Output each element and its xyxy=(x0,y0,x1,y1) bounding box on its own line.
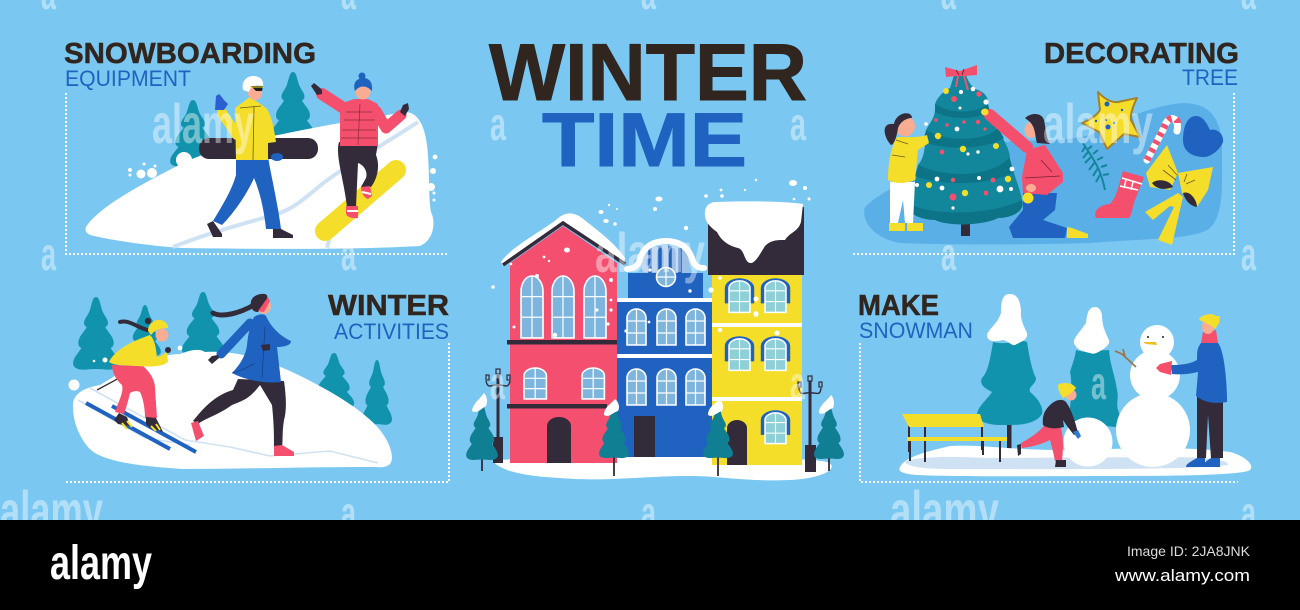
panel: snowboarding xyxy=(64,38,437,249)
heading: decorating tree: TREE xyxy=(1182,65,1238,90)
heading: winter activities xyxy=(328,290,449,344)
watermarks: a xyxy=(490,357,505,409)
footer band: Image ID: 2JA8JNK xyxy=(1127,543,1251,559)
background trees xyxy=(170,72,315,167)
ski trails xyxy=(78,388,378,463)
title: TIME xyxy=(542,98,747,183)
small trees with snow caps xyxy=(466,393,844,476)
heading: make snowman: MAKE xyxy=(858,290,939,322)
title xyxy=(489,28,807,183)
fern sprig xyxy=(1082,143,1109,190)
house: yellow xyxy=(705,201,804,465)
house: pink xyxy=(501,213,625,463)
watermarks: a xyxy=(790,98,806,150)
person: child xyxy=(1017,383,1081,467)
yellow bow xyxy=(1145,145,1213,245)
snowboard: yellow xyxy=(325,170,396,231)
person: girl xyxy=(885,113,929,231)
footer band: alamy xyxy=(50,537,152,590)
person: skater xyxy=(191,294,294,456)
heading: decorating tree: DECORATING xyxy=(1044,38,1239,70)
tree bow xyxy=(945,65,977,90)
panel: decorating tree xyxy=(864,38,1239,245)
panel: make snowman xyxy=(858,290,1251,476)
watermarks: a xyxy=(341,228,356,280)
ski trails xyxy=(173,122,418,248)
heading: make snowman xyxy=(858,290,973,343)
heading: snowboarding equipment xyxy=(64,38,316,91)
panel: town center xyxy=(466,179,844,480)
title: WINTER xyxy=(489,28,807,118)
footer band xyxy=(0,520,1300,610)
watermarks: alamy xyxy=(0,479,103,542)
person: snowboarder in pink xyxy=(311,72,409,218)
watermarks: alamy xyxy=(152,92,254,155)
house: blue xyxy=(617,241,712,457)
watermarks: a xyxy=(641,228,656,280)
person: skier xyxy=(86,318,196,452)
watermarks: a xyxy=(490,98,506,150)
cookie star xyxy=(1082,92,1140,149)
snow shadow xyxy=(905,457,1228,469)
person: man building snowman xyxy=(1156,314,1227,467)
snowballs xyxy=(128,152,437,202)
background blob xyxy=(864,103,1222,244)
watermarks: a xyxy=(41,228,56,280)
watermarks: a xyxy=(341,487,356,539)
background trees xyxy=(73,292,392,425)
watermarks: a xyxy=(941,228,956,280)
snow ground xyxy=(493,457,832,480)
christmas stocking xyxy=(1095,171,1144,218)
watermarks: a xyxy=(1241,228,1256,280)
cookie dots xyxy=(1095,102,1123,130)
watermarks: a xyxy=(1091,357,1106,409)
panel frames xyxy=(66,93,1238,482)
snowball being rolled xyxy=(1064,418,1112,466)
heading: decorating tree xyxy=(1044,38,1239,90)
watermarks: alamy xyxy=(1043,92,1153,155)
watermarks: a xyxy=(790,357,805,409)
heart xyxy=(1183,116,1223,157)
christmas tree xyxy=(907,72,1023,236)
person: woman kneeling xyxy=(982,108,1088,238)
bench xyxy=(902,414,1007,462)
falling snowflakes xyxy=(491,179,810,337)
heading: snowboarding equipment: EQUIPMENT xyxy=(65,66,191,91)
footer band: www.alamy.com xyxy=(1114,566,1250,585)
trees with snow caps xyxy=(977,294,1120,461)
snowball xyxy=(68,346,182,390)
candy cane xyxy=(1147,118,1177,160)
watermarks: alamy xyxy=(595,221,705,284)
snow hill xyxy=(73,350,392,469)
person: snowboarder with helmet xyxy=(207,76,293,238)
street lamps xyxy=(486,369,822,472)
snowman xyxy=(1115,325,1190,467)
heading: make snowman: SNOWMAN xyxy=(859,318,973,343)
heading: snowboarding equipment: SNOWBOARDING xyxy=(64,38,316,70)
heading: winter activities: WINTER xyxy=(328,290,449,322)
watermarks: a xyxy=(1241,487,1256,539)
snow hill xyxy=(85,112,433,249)
watermarks: a xyxy=(641,487,656,539)
heading: winter activities: ACTIVITIES xyxy=(334,319,449,344)
watermarks: alamy xyxy=(890,479,999,542)
panel: winter activities xyxy=(68,290,449,469)
snow ground xyxy=(899,446,1251,476)
snowboard: black xyxy=(199,138,318,159)
